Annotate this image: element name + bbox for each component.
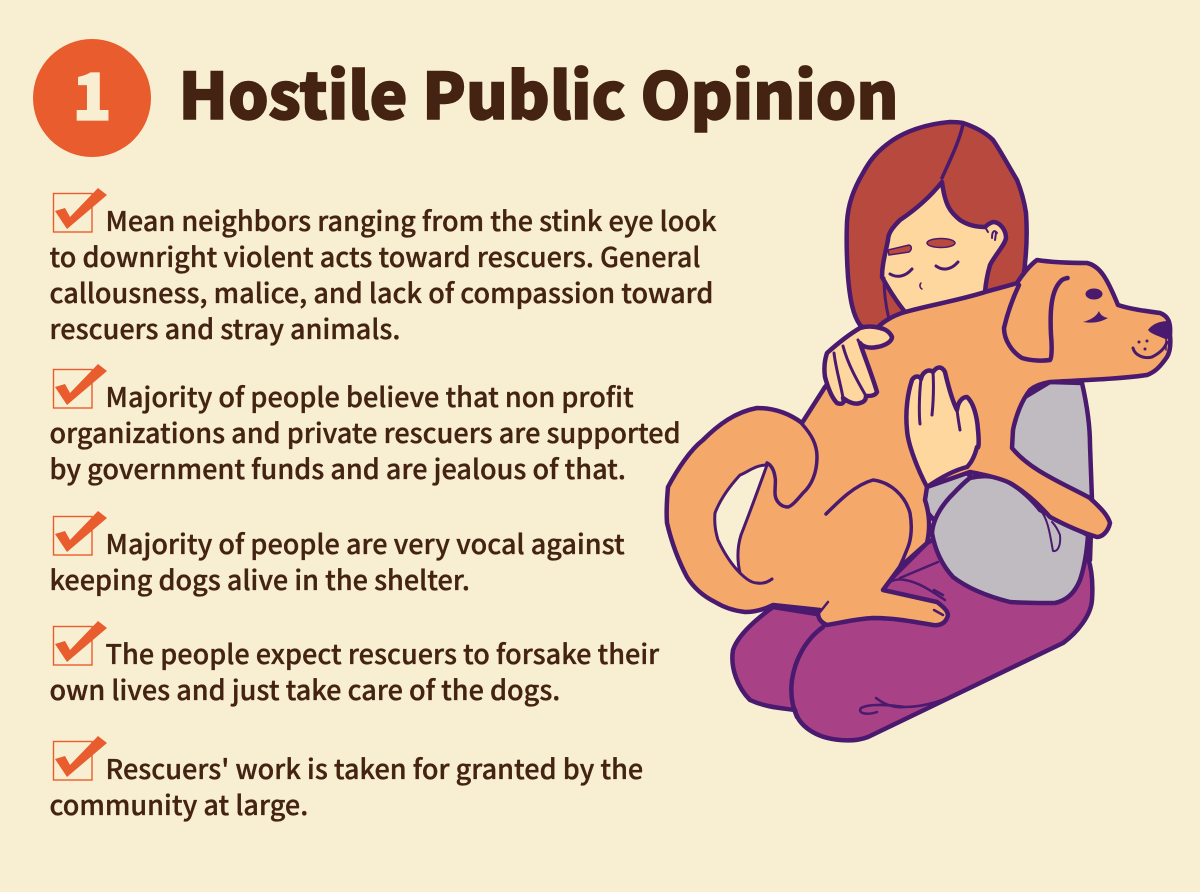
lower hand fingers xyxy=(919,372,960,430)
lower hand xyxy=(906,368,979,487)
bullet 2: Majority of people believe that non profit xyxy=(106,376,634,415)
pants fold xyxy=(860,692,960,714)
bullet 3: keeping dogs alive in the shelter. xyxy=(50,559,470,598)
upper hand xyxy=(824,326,892,404)
dog ear xyxy=(1004,278,1068,361)
tail gap xyxy=(715,465,767,573)
sleeve fold xyxy=(1040,510,1060,551)
tail lower arc xyxy=(740,573,772,583)
woman face xyxy=(882,182,1006,312)
pants front leg xyxy=(791,627,823,717)
upper hand fingers xyxy=(834,340,866,398)
bullet 3: Majority of people are very vocal against xyxy=(106,523,625,562)
eyebrows xyxy=(888,238,955,255)
bullet 4: The people expect rescuers to forsake their xyxy=(106,633,660,672)
bullet 2 xyxy=(50,364,681,487)
dog haunch xyxy=(826,480,911,570)
dog eye lash xyxy=(1083,311,1108,323)
bullet 1: Mean neighbors ranging from the stink eye look xyxy=(106,200,717,239)
number badge: 1 xyxy=(72,45,112,139)
dog mouth xyxy=(1133,335,1167,358)
gray sleeve xyxy=(932,476,1088,603)
haunch spur xyxy=(820,602,828,612)
paw lines xyxy=(883,579,945,615)
bullet 1: to downright violent acts toward rescuers. General xyxy=(50,236,700,275)
bullet 3 xyxy=(50,511,625,598)
purple pants xyxy=(732,500,1092,740)
dog nose xyxy=(1148,321,1169,340)
tail curl xyxy=(767,424,817,507)
dog eye xyxy=(1086,288,1102,300)
hair parting xyxy=(942,124,963,178)
bullet 2: by government funds and are jealous of that. xyxy=(50,448,626,487)
title: Hostile Public Opinion xyxy=(178,46,898,138)
bullet 1: callousness, malice, and lack of compassion toward xyxy=(50,272,713,311)
bullet 4: own lives and just take care of the dogs. xyxy=(50,669,560,708)
bullet 1 xyxy=(50,188,717,347)
hair xyxy=(847,122,1027,330)
bullet 4 xyxy=(50,621,660,708)
pants crease xyxy=(900,562,938,578)
gray torso xyxy=(1000,382,1092,560)
closed eyes and nose xyxy=(890,262,958,289)
bullet 5 xyxy=(50,736,643,823)
hair strand beside face xyxy=(884,278,889,319)
gray sleeve cuff xyxy=(923,468,972,520)
bullet 2: organizations and private rescuers are supported xyxy=(50,412,681,451)
number badge xyxy=(33,39,151,157)
dog body xyxy=(667,260,1170,625)
ear detail xyxy=(985,227,997,240)
bullet 5: Rescuers' work is taken for granted by the xyxy=(106,748,643,787)
bullet 5: community at large. xyxy=(50,784,308,823)
illustration: woman hugging dog xyxy=(667,122,1170,740)
bullet 1: rescuers and stray animals. xyxy=(50,308,400,347)
